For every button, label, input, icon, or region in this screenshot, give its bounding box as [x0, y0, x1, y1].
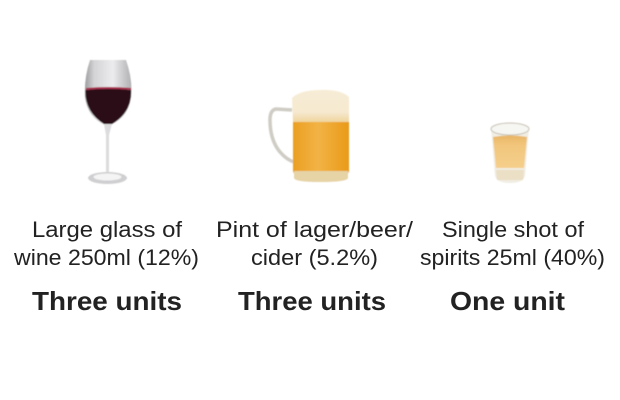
text: spirits description: spirits 25ml (40%): [420, 245, 605, 270]
icon: beer mug: [270, 90, 349, 182]
icon: shot glass: [491, 123, 529, 183]
text: spirits description: [420, 217, 605, 270]
text: wine description: Large glass of: [32, 217, 183, 242]
icon: wine glass: [85, 60, 131, 184]
text: beer description: [216, 217, 414, 270]
label: wine units: Three units: [32, 286, 182, 316]
text: spirits description: Single shot of: [442, 217, 585, 242]
text: beer description: cider (5.2%): [251, 245, 378, 270]
label: beer units: Three units: [238, 286, 386, 316]
text: beer description: Pint of lager/beer/: [216, 217, 414, 242]
label: spirits units: One unit: [450, 286, 565, 316]
text: wine description: [13, 217, 199, 270]
text: wine description: wine 250ml (12%): [13, 245, 199, 270]
